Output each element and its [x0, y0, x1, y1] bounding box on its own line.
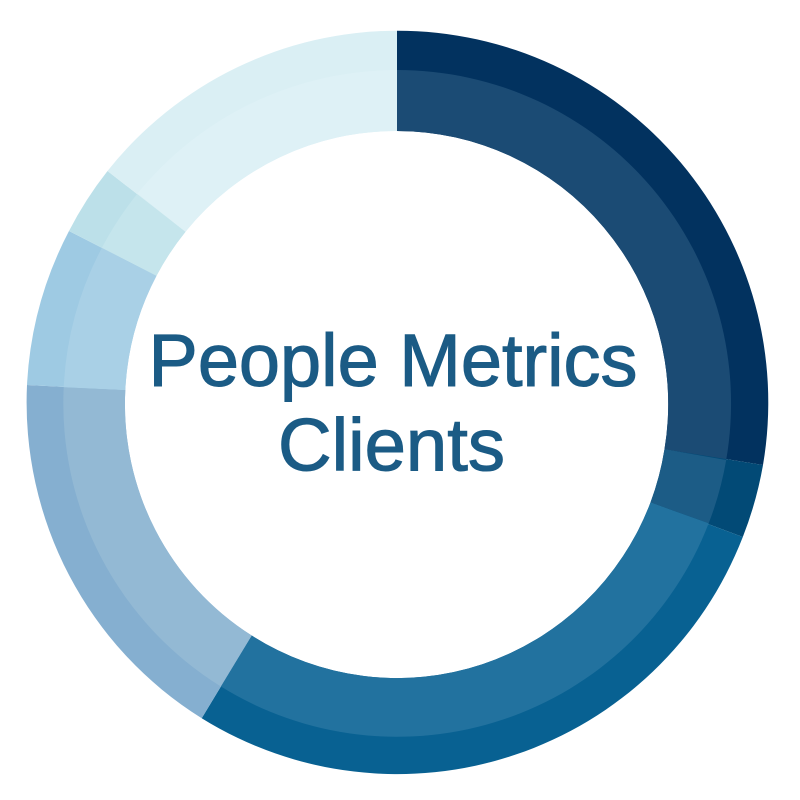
segment 1: darkest navy — [397, 31, 768, 465]
center title — [148, 319, 638, 486]
segment 2: dark blue — [650, 449, 763, 537]
segment 7: palest blue — [108, 31, 397, 232]
segment 5: light blue — [27, 231, 156, 390]
title line 2: Clients — [278, 404, 505, 486]
title line 1: People Metrics — [148, 319, 638, 402]
segment 3: medium blue — [202, 502, 743, 774]
segment 4: muted steel blue — [27, 385, 252, 718]
segment 6: pale teal — [69, 171, 186, 276]
